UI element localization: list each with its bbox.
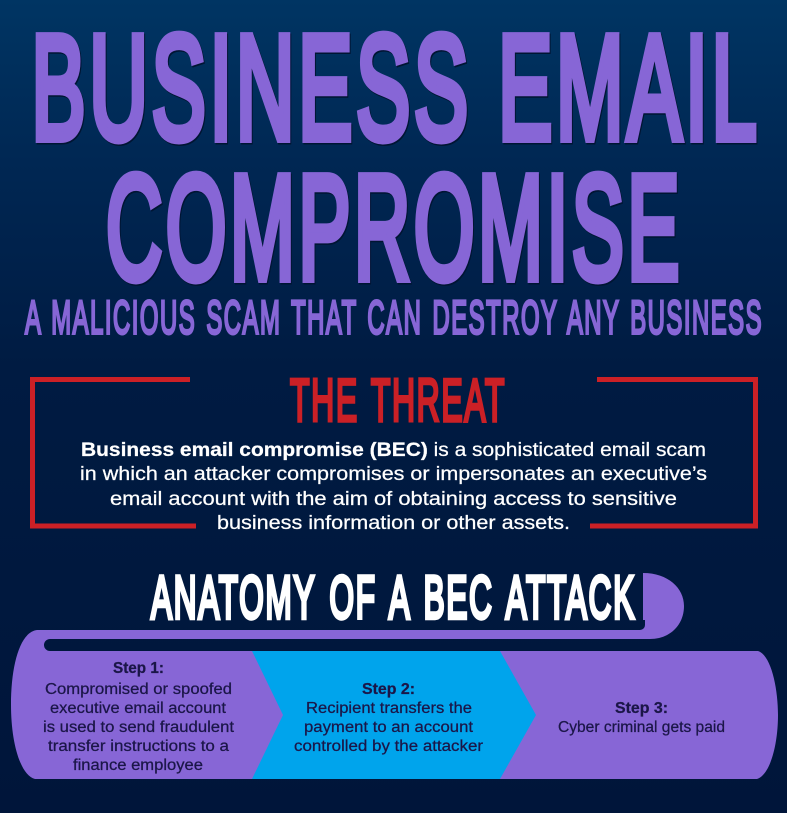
step 3 text: Step 3:	[615, 700, 668, 717]
step 2 text: controlled by the attacker	[294, 738, 483, 755]
threat description: in which an attacker compromises or impersonates an executive’s	[80, 463, 707, 485]
step 1 text: Compromised or spoofed	[45, 681, 232, 698]
step 1 text: Step 1:	[113, 660, 164, 677]
panel: the threat	[32, 367, 756, 534]
threat description: business information or other assets.	[217, 512, 570, 534]
step 3 text	[558, 700, 725, 736]
step 2 text: Recipient transfers the	[306, 700, 472, 717]
step 1 text	[43, 660, 235, 774]
step 2 text	[294, 681, 483, 755]
red bracket frame	[32, 380, 756, 526]
panel: attack steps ribbon	[11, 573, 778, 779]
title	[32, 6, 762, 312]
threat description: email account with the aim of obtaining access to sensitive	[110, 488, 677, 510]
step 1 text: finance employee	[73, 757, 203, 774]
blue chevron: step 2	[252, 651, 536, 779]
step 2 text: payment to an account	[304, 719, 474, 736]
step 2 text: Step 2:	[362, 681, 415, 698]
threat description	[80, 439, 707, 534]
ribbon shape	[11, 573, 778, 779]
step 1 text: executive email account	[50, 700, 227, 717]
step 1 text: is used to send fraudulent	[43, 719, 235, 736]
step 3 text: Cyber criminal gets paid	[558, 719, 725, 736]
threat heading: THE THREAT	[290, 367, 506, 434]
step 1 text: transfer instructions to a	[48, 738, 229, 755]
threat description: Business email compromise (BEC) is a sophisticated email scam	[81, 439, 706, 461]
